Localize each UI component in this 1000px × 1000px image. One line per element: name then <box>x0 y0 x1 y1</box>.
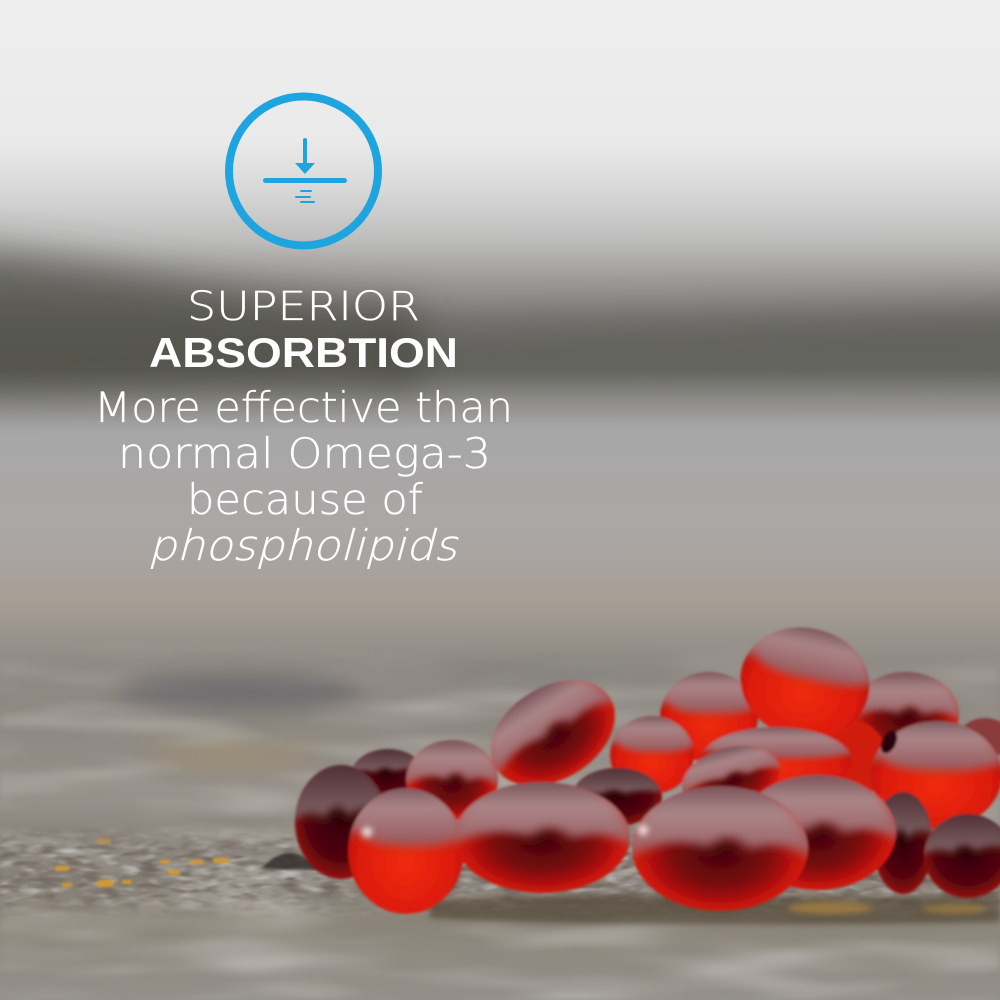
capsule: right rear dark <box>869 786 934 894</box>
heading: SUPERIOR <box>187 284 420 330</box>
text block: benefit description <box>94 383 513 570</box>
capsule: front right <box>729 768 905 890</box>
heading <box>149 284 458 376</box>
text block: benefit description: More effective than <box>94 383 513 432</box>
capsule: left pale <box>400 735 504 820</box>
capsule: front centre <box>443 775 641 893</box>
text block: benefit description: phospholipids <box>148 521 459 570</box>
capsule: centre wide <box>694 723 855 795</box>
icon glint: right capsule dark spot <box>878 728 900 756</box>
icon: absorption arrow in circle <box>229 96 378 246</box>
heading: ABSORBTION <box>149 329 458 376</box>
capsule: back right <box>959 718 1000 758</box>
text block: benefit description: because of <box>187 475 423 524</box>
capsule: rear left <box>348 746 425 799</box>
capsule: rear centre <box>656 667 760 762</box>
capsule: far left dark <box>289 758 389 879</box>
capsule: middle dark <box>567 765 664 826</box>
capsule: front left <box>343 780 466 914</box>
capsule: rear right <box>846 667 965 756</box>
text block: benefit description: normal Omega-3 <box>118 429 491 478</box>
capsule: centre pale <box>668 731 793 821</box>
capsule: centre small <box>607 711 696 794</box>
capsule: far right dark <box>919 809 1000 898</box>
lichen specks on stone <box>55 838 229 887</box>
capsule: right bright <box>866 715 1000 829</box>
krill oil capsules <box>289 608 1000 914</box>
capsule: filler red behind pile <box>812 720 888 800</box>
capsule: top bright <box>725 608 884 751</box>
capsule: front middle <box>621 778 819 911</box>
capsule: tilted dark <box>462 650 641 812</box>
